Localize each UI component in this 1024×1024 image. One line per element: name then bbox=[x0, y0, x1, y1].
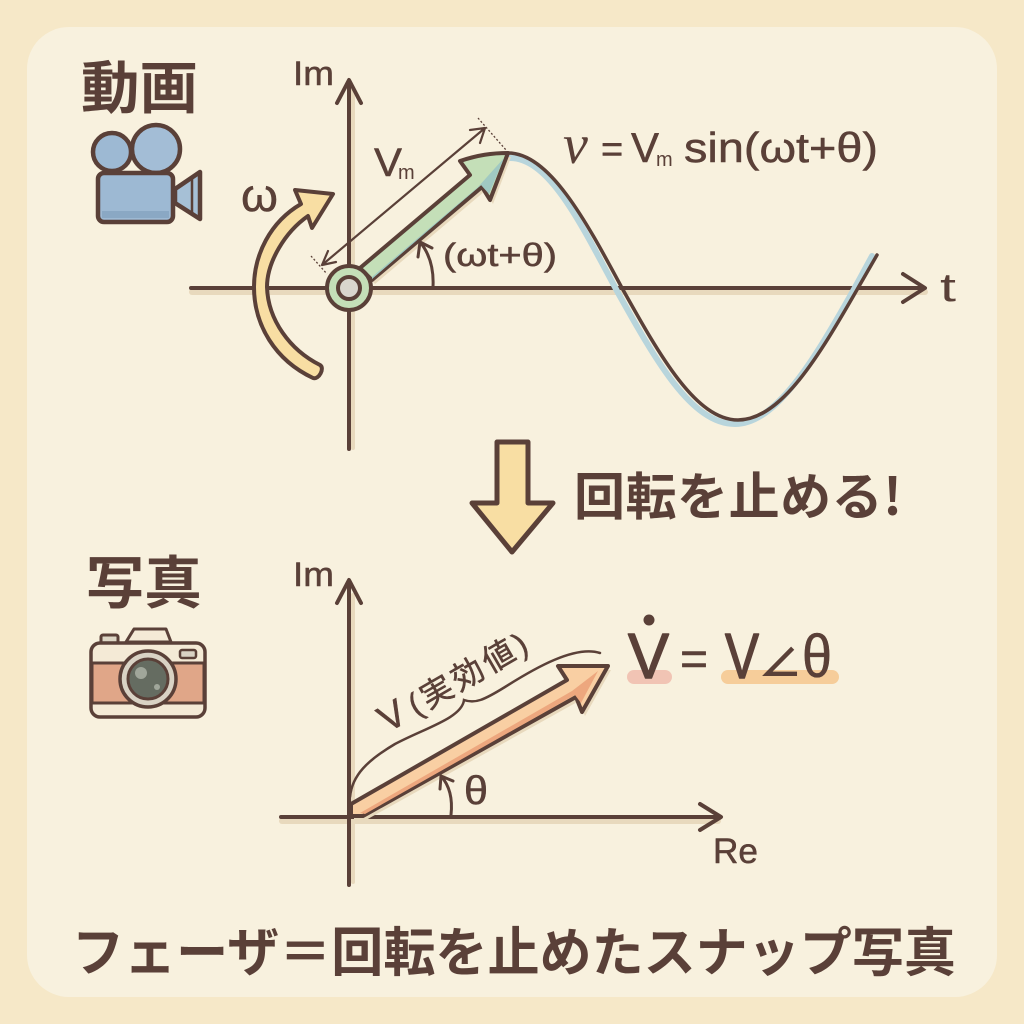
label: theta: θ bbox=[464, 769, 488, 813]
label: Vm bbox=[374, 141, 415, 185]
label: V (実効値) bbox=[371, 622, 535, 741]
heading: 写真: 写真 bbox=[86, 538, 202, 620]
label: Re: Re bbox=[713, 832, 758, 871]
label: V (実効値): (実効値) bbox=[401, 626, 534, 723]
label: omega: ω bbox=[241, 169, 278, 221]
label: Vm: m bbox=[398, 162, 415, 184]
equation: v = Vm sin(wt+theta): ν bbox=[563, 114, 588, 176]
footer caption: フェーザ＝回転を止めたスナップ写真 bbox=[72, 911, 956, 987]
label: Im upper: Im bbox=[293, 55, 334, 93]
label: Vm: V bbox=[374, 141, 402, 185]
icon: photo camera bbox=[91, 629, 205, 717]
equation: V = V angle theta bbox=[627, 614, 839, 692]
angle arc wt+theta bbox=[418, 242, 433, 287]
text: 回転を止める!: 回転を止める! bbox=[574, 456, 902, 530]
equation: v = Vm sin(wt+theta) bbox=[563, 114, 878, 176]
sine wave bbox=[508, 153, 877, 424]
equation: V = V angle theta: = bbox=[680, 633, 708, 686]
equation: V = V angle theta: V bbox=[725, 620, 759, 692]
equation: V = V angle theta: θ bbox=[802, 623, 832, 690]
equation: V = V angle theta: ∠ bbox=[758, 626, 802, 690]
arrow: down bbox=[472, 442, 553, 552]
equation: v = Vm sin(wt+theta): = bbox=[601, 129, 623, 171]
brace bbox=[350, 651, 600, 797]
equation: v = Vm sin(wt+theta): sin(ωt+θ) bbox=[684, 124, 878, 171]
arrow: green rotating phasor bbox=[327, 153, 511, 310]
equation: v = Vm sin(wt+theta): m bbox=[656, 149, 673, 171]
arrow: omega rotation bbox=[254, 190, 333, 378]
heading: 動画: 動画 bbox=[81, 43, 198, 125]
label: t: t bbox=[940, 266, 956, 310]
arrow: orange static phasor bbox=[351, 666, 611, 820]
label: (wt+theta): (ωt+θ) bbox=[443, 237, 557, 273]
upper axes bbox=[191, 80, 925, 449]
icon: video camera bbox=[93, 125, 200, 222]
label: Im lower: Im bbox=[293, 556, 334, 594]
equation: v = Vm sin(wt+theta): V bbox=[631, 124, 659, 171]
label: V (実効値): V bbox=[371, 692, 414, 741]
lower axes bbox=[281, 580, 721, 885]
Vm dimension line bbox=[311, 118, 506, 274]
angle arc theta bbox=[440, 776, 453, 815]
equation: V = V angle theta: V bbox=[628, 620, 669, 692]
